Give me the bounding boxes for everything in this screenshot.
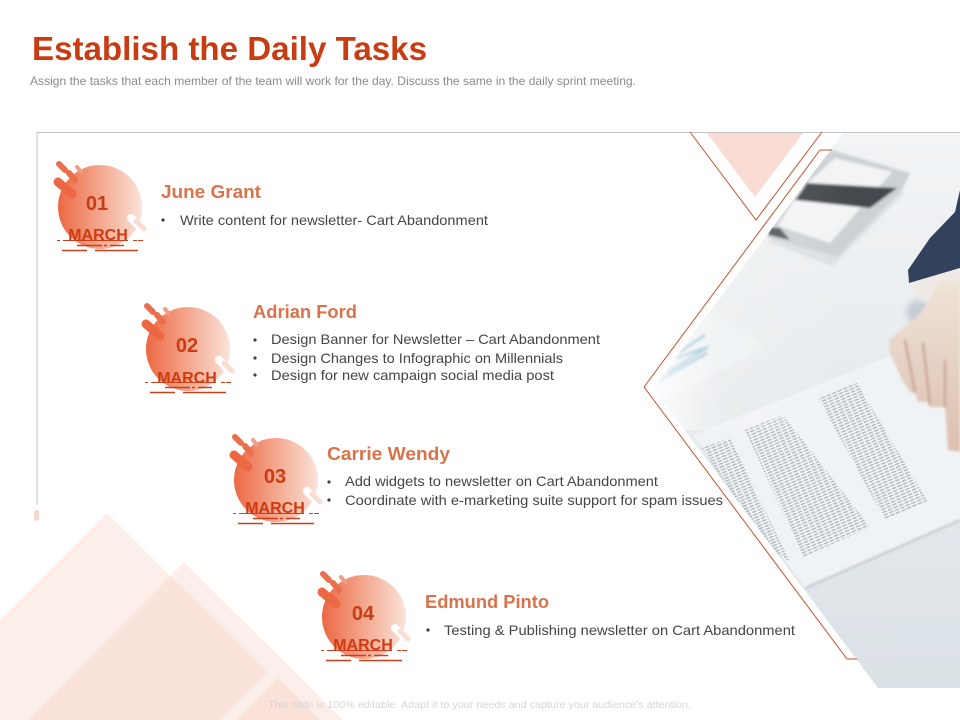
badge 01 bbox=[57, 164, 144, 250]
badge 04 bbox=[321, 574, 408, 660]
badge 03: MARCH bbox=[245, 500, 305, 517]
person 3: Carrie Wendy: Carrie Wendy bbox=[327, 444, 450, 464]
chart page bbox=[660, 334, 709, 380]
badge 04: 04 bbox=[352, 603, 375, 625]
badge 03: 03 bbox=[264, 466, 286, 488]
hand shadow bbox=[906, 300, 930, 324]
document bbox=[694, 380, 960, 589]
photo: desk with tablet, documents and hand bbox=[640, 130, 960, 690]
person 1: June Grant: Write content for newsletter- Cart Abandonment bbox=[180, 212, 488, 228]
frame lines bbox=[34, 132, 960, 521]
person 2: Adrian Ford: Adrian Ford bbox=[253, 302, 357, 322]
badge 01: 01 bbox=[86, 193, 108, 215]
person 3: Carrie Wendy bbox=[327, 444, 723, 508]
footer note: This slide is 100% editable. Adapt it to your needs and capture your audience's attention. bbox=[268, 699, 691, 711]
badge 02: MARCH bbox=[157, 370, 217, 387]
person 1: June Grant: June Grant bbox=[161, 182, 261, 202]
title: Establish the Daily Tasks bbox=[32, 30, 427, 67]
person 4: Edmund Pinto: Edmund Pinto bbox=[425, 592, 549, 612]
orange outline lines bbox=[644, 132, 857, 659]
person 2: Adrian Ford bbox=[253, 302, 600, 383]
person 3: Carrie Wendy: Coordinate with e-marketing suite support for spam issues bbox=[345, 492, 723, 508]
person 2: Adrian Ford: Design Changes to Infographic on Millennials bbox=[271, 350, 563, 366]
person 4: Edmund Pinto bbox=[425, 592, 795, 638]
badge 02 bbox=[145, 306, 232, 392]
hand bbox=[889, 281, 960, 452]
tablet bbox=[768, 150, 910, 266]
suit sleeve bbox=[908, 190, 960, 302]
person 3: Carrie Wendy: Add widgets to newsletter on Cart Abandonment bbox=[345, 473, 658, 489]
person 1: June Grant bbox=[161, 182, 488, 228]
person 2: Adrian Ford: Design Banner for Newsletter – Cart Abandonment bbox=[271, 331, 600, 347]
badge 02: 02 bbox=[176, 335, 198, 357]
left fade on the photo bbox=[654, 186, 810, 430]
badge 04: MARCH bbox=[333, 637, 393, 654]
background triangles bottom-left bbox=[0, 513, 343, 720]
badge 01: MARCH bbox=[68, 227, 128, 244]
subtitle: Assign the tasks that each member of the team will work for the day. Discuss the same in the daily sprint meeting. bbox=[30, 74, 636, 88]
person 2: Adrian Ford: Design for new campaign social media post bbox=[271, 367, 554, 383]
pink triangle top bbox=[707, 133, 803, 197]
badge 03 bbox=[233, 437, 320, 524]
person 4: Edmund Pinto: Testing & Publishing newsletter on Cart Abandonment bbox=[444, 622, 795, 638]
